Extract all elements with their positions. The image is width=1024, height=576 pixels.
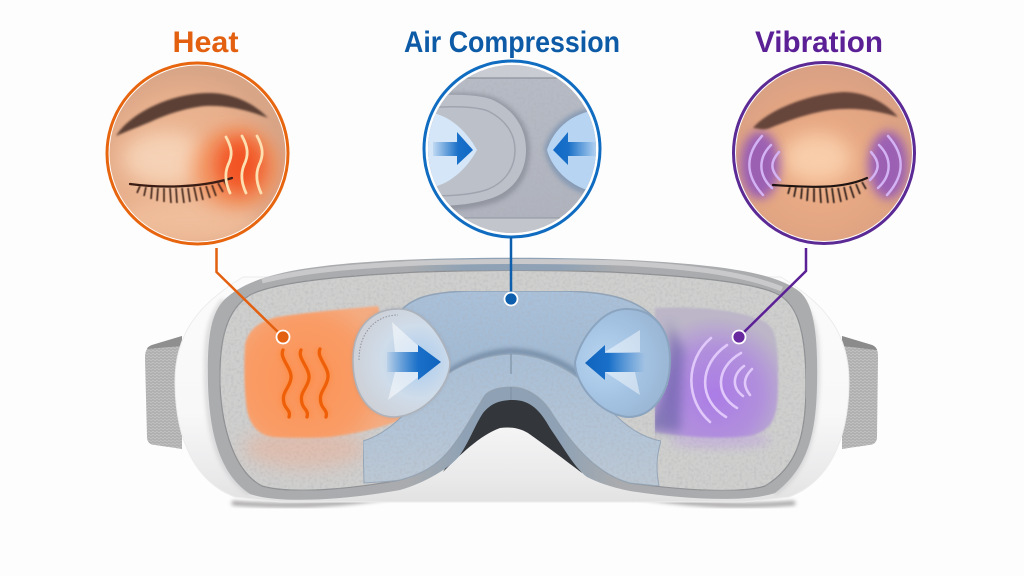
title: Vibration: Vibration	[755, 26, 883, 59]
shadow above lower band	[420, 351, 602, 398]
icon: heat waves	[282, 349, 328, 417]
fleece padding ring	[220, 270, 806, 490]
connector: heat	[216, 248, 290, 344]
title: Air Compression: Air Compression	[404, 26, 620, 59]
air pad: right	[575, 309, 670, 417]
icon: vibration arcs	[691, 338, 752, 422]
rim top band highlight	[262, 262, 782, 289]
strap: left	[145, 336, 182, 449]
shell shade beside rim	[207, 300, 817, 493]
blue brow band	[360, 291, 668, 385]
connector: vibration	[732, 248, 806, 344]
strap: right	[842, 336, 878, 449]
dark nose lining	[443, 390, 582, 473]
connector: air compression	[504, 237, 518, 306]
callout circle: heat on closed eye	[105, 60, 290, 250]
arrow: air pushing left	[585, 345, 645, 380]
grey fabric rim	[208, 258, 817, 500]
heat zone	[244, 306, 405, 438]
air pad: left	[353, 309, 450, 417]
heat glow on padding	[243, 428, 367, 468]
centre seams	[510, 354, 512, 400]
callout circle: air compression close-up	[424, 60, 600, 242]
white outer shell	[175, 277, 849, 502]
eye mask product	[145, 258, 878, 502]
mask ground shadow	[232, 489, 795, 505]
vibration zone	[645, 308, 778, 448]
blue lower band	[363, 354, 661, 486]
callout circle: vibration around eye	[732, 60, 917, 250]
title: Heat: Heat	[172, 26, 239, 59]
arrow: air pushing right	[387, 345, 441, 380]
